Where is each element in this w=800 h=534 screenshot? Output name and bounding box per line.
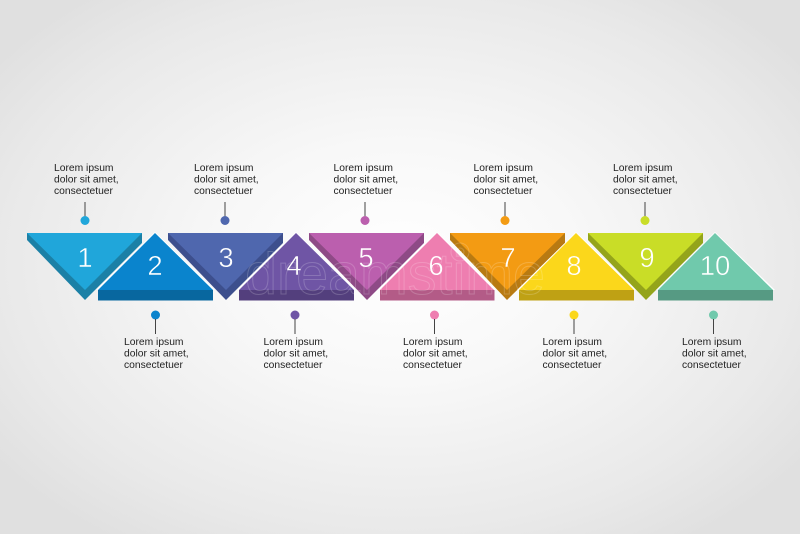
label 1: dolor sit amet,	[54, 174, 119, 186]
label 6: dolor sit amet,	[403, 348, 468, 360]
step 8	[517, 232, 636, 371]
label 10: Lorem ipsum	[682, 337, 742, 348]
triangle 7	[450, 233, 565, 300]
label 9: dolor sit amet,	[613, 174, 678, 186]
number 8: 8	[566, 250, 582, 281]
label 9: Lorem ipsum	[613, 163, 673, 174]
label 2: consectetuer	[124, 360, 184, 371]
triangle 1	[27, 233, 142, 300]
pin 5	[360, 202, 370, 225]
label 1: Lorem ipsum	[54, 163, 114, 174]
number 7: 7	[500, 242, 516, 273]
label 4: consectetuer	[264, 360, 323, 371]
triangle 3	[168, 233, 283, 300]
triangle 8	[517, 232, 636, 300]
label 1: consectetuer	[54, 186, 114, 197]
triangle 4	[237, 232, 356, 300]
label 7: Lorem ipsum	[474, 163, 533, 174]
triangle 6	[378, 232, 496, 300]
pin 8	[570, 310, 578, 334]
step 10	[656, 232, 775, 371]
label 2: dolor sit amet,	[124, 348, 189, 360]
number 10: 10	[700, 250, 730, 281]
number 4: 4	[286, 250, 302, 281]
label 6: Lorem ipsum	[403, 337, 463, 348]
label 2: Lorem ipsum	[124, 337, 184, 348]
label 5: dolor sit amet,	[334, 174, 398, 186]
label 5: Lorem ipsum	[334, 163, 393, 174]
label 7: consectetuer	[474, 186, 533, 197]
pin 9	[640, 202, 650, 225]
label 3: consectetuer	[194, 186, 254, 197]
pin 4	[290, 310, 300, 334]
number 2: 2	[147, 250, 163, 281]
label 9: consectetuer	[613, 186, 673, 197]
triangle 9	[588, 233, 703, 300]
step 9	[588, 163, 703, 300]
label 4: Lorem ipsum	[264, 337, 323, 348]
pin 1	[80, 202, 90, 225]
label 8: Lorem ipsum	[542, 337, 602, 348]
label 8: consectetuer	[542, 360, 602, 371]
watermark: dreamstime	[245, 242, 545, 307]
step 7	[450, 163, 565, 300]
triangle 5	[309, 233, 424, 300]
triangle 10	[656, 232, 775, 300]
label 8: dolor sit amet,	[542, 348, 607, 360]
label 5: consectetuer	[334, 186, 393, 197]
label 10: consectetuer	[682, 360, 742, 371]
pin 2	[151, 310, 160, 334]
label 10: dolor sit amet,	[682, 348, 747, 360]
pin 7	[500, 202, 510, 225]
step 2	[96, 232, 215, 371]
number 1: 1	[77, 242, 93, 273]
pin 10	[709, 310, 718, 334]
label 3: dolor sit amet,	[194, 174, 259, 186]
step 3	[168, 163, 283, 300]
step 6	[378, 232, 496, 371]
pin 3	[220, 202, 230, 225]
label 3: Lorem ipsum	[194, 163, 254, 174]
number 9: 9	[639, 242, 655, 273]
number 3: 3	[218, 242, 234, 273]
label 6: consectetuer	[403, 360, 463, 371]
step 4	[237, 232, 356, 371]
number 6: 6	[428, 250, 444, 281]
pin 6	[430, 310, 439, 334]
label 7: dolor sit amet,	[474, 174, 538, 186]
step 5	[309, 163, 424, 300]
number 5: 5	[358, 242, 374, 273]
step 1	[27, 163, 142, 300]
triangle 2	[96, 232, 215, 300]
label 4: dolor sit amet,	[264, 348, 328, 360]
